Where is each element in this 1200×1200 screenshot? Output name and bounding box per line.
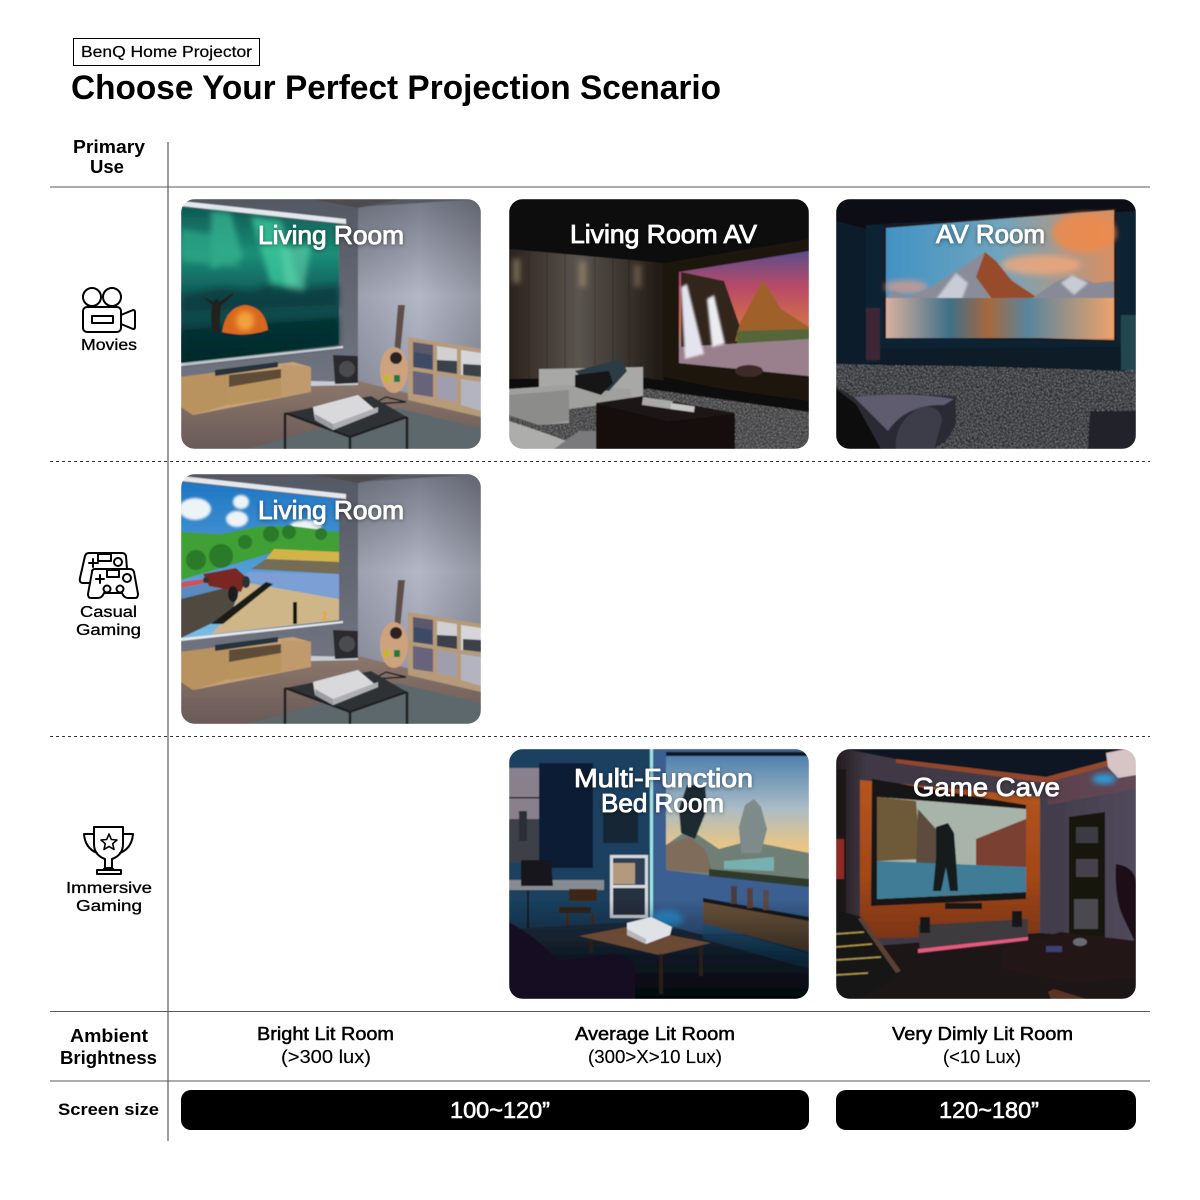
projected image: statue landscape [666, 752, 809, 887]
scene: living room, movies [181, 199, 481, 449]
title: Choose Your Perfect Projection Scenario [71, 69, 721, 107]
row label: movies: Movies [81, 337, 137, 354]
screen size bar: 100 to 120 inch: 100~120” [450, 1097, 550, 1123]
scene title: Game Cave [913, 772, 1060, 802]
screen size bar: 120 to 180 inch: 120~180” [939, 1097, 1039, 1123]
soundbar [945, 903, 982, 909]
brightness: very dimly lit room: (<10 Lux) [943, 1047, 1021, 1067]
icon: trophy [84, 827, 133, 874]
scene title: AV Room [936, 219, 1045, 249]
row label: ambient brightness [60, 1026, 157, 1068]
floor [509, 921, 809, 999]
icon: game controllers [80, 553, 138, 598]
column heading: primary use: Primary [73, 137, 145, 157]
row label: immersive gaming: Gaming [76, 898, 142, 915]
coffee table and projector [579, 917, 711, 994]
column heading: primary use: Use [90, 157, 124, 177]
media console [703, 886, 809, 969]
icon: movie camera [83, 288, 135, 332]
light strip [650, 749, 653, 924]
armchairs [836, 387, 1136, 449]
race buggy [203, 568, 250, 602]
coffee table [596, 396, 735, 449]
tent [222, 305, 268, 335]
brightness: average lit room [575, 1024, 735, 1067]
scene: living room AV, movies [509, 199, 809, 449]
brightness: average lit room: Average Lit Room [575, 1024, 735, 1044]
row label: casual gaming: Casual [80, 604, 137, 621]
floor [836, 933, 1136, 999]
brightness: bright lit room [257, 1024, 394, 1067]
row label: casual gaming [76, 553, 141, 639]
tv stand with pink light [918, 911, 1028, 953]
scene title: Multi-Function [574, 763, 753, 793]
scene title: Living Room [258, 220, 404, 250]
armchair [509, 922, 635, 999]
desk and chair [509, 860, 605, 928]
gaming chair [1116, 864, 1136, 944]
scene title: Bed Room [601, 788, 724, 818]
projected image: racing game: 1 [321, 608, 328, 623]
person [202, 293, 233, 332]
bookshelf [610, 855, 648, 918]
scene: multi-function bedroom, immersive gaming [509, 749, 809, 999]
row label: casual gaming: Gaming [76, 622, 141, 639]
brand tag: BenQ Home Projector [81, 44, 252, 61]
row label: immersive gaming: Immersive [66, 880, 152, 897]
scene title: Living Room [258, 495, 404, 525]
scene: AV room, movies [836, 199, 1136, 449]
screen size bar: 100 to 120 inch [181, 1090, 809, 1130]
foosball table [836, 910, 901, 999]
scene title [574, 763, 753, 818]
row label: screen size: Screen size [58, 1101, 159, 1119]
brightness: average lit room: (300>X>10 Lux) [588, 1047, 722, 1067]
brightness: bright lit room: Bright Lit Room [257, 1024, 394, 1044]
screen size bar: 120 to 180 inch [836, 1090, 1136, 1130]
bookshelf [1069, 812, 1105, 937]
projected image: snowy mountain lake [884, 208, 1116, 342]
projected image: game village [871, 779, 1026, 906]
brightness: very dimly lit room [892, 1024, 1073, 1067]
scene: living room, casual gaming [179, 474, 481, 724]
window [509, 768, 539, 863]
poster [603, 810, 638, 843]
scene: game cave, immersive gaming [836, 749, 1136, 999]
grid lines [50, 142, 1150, 1141]
coffee table [1003, 932, 1136, 999]
row label: immersive gaming [66, 827, 152, 915]
row label: movies [81, 288, 137, 354]
ceiling projector [1092, 749, 1136, 784]
projected image: aurora and tent [181, 207, 339, 363]
row label: ambient brightness: Ambient [70, 1026, 148, 1046]
brightness: very dimly lit room: Very Dimly Lit Room [892, 1024, 1073, 1044]
projected image: waterfall and mountain [679, 251, 809, 377]
brand tag [74, 38, 260, 66]
projected image: racing game [179, 482, 339, 638]
row label: ambient brightness: Brightness [60, 1048, 157, 1068]
speakers [866, 308, 1136, 370]
sofa [509, 359, 643, 449]
column heading: primary use [73, 137, 145, 177]
scene title: Living Room AV [570, 219, 758, 249]
brightness: bright lit room: (>300 lux) [281, 1047, 371, 1067]
orange glow wall [860, 780, 1040, 939]
